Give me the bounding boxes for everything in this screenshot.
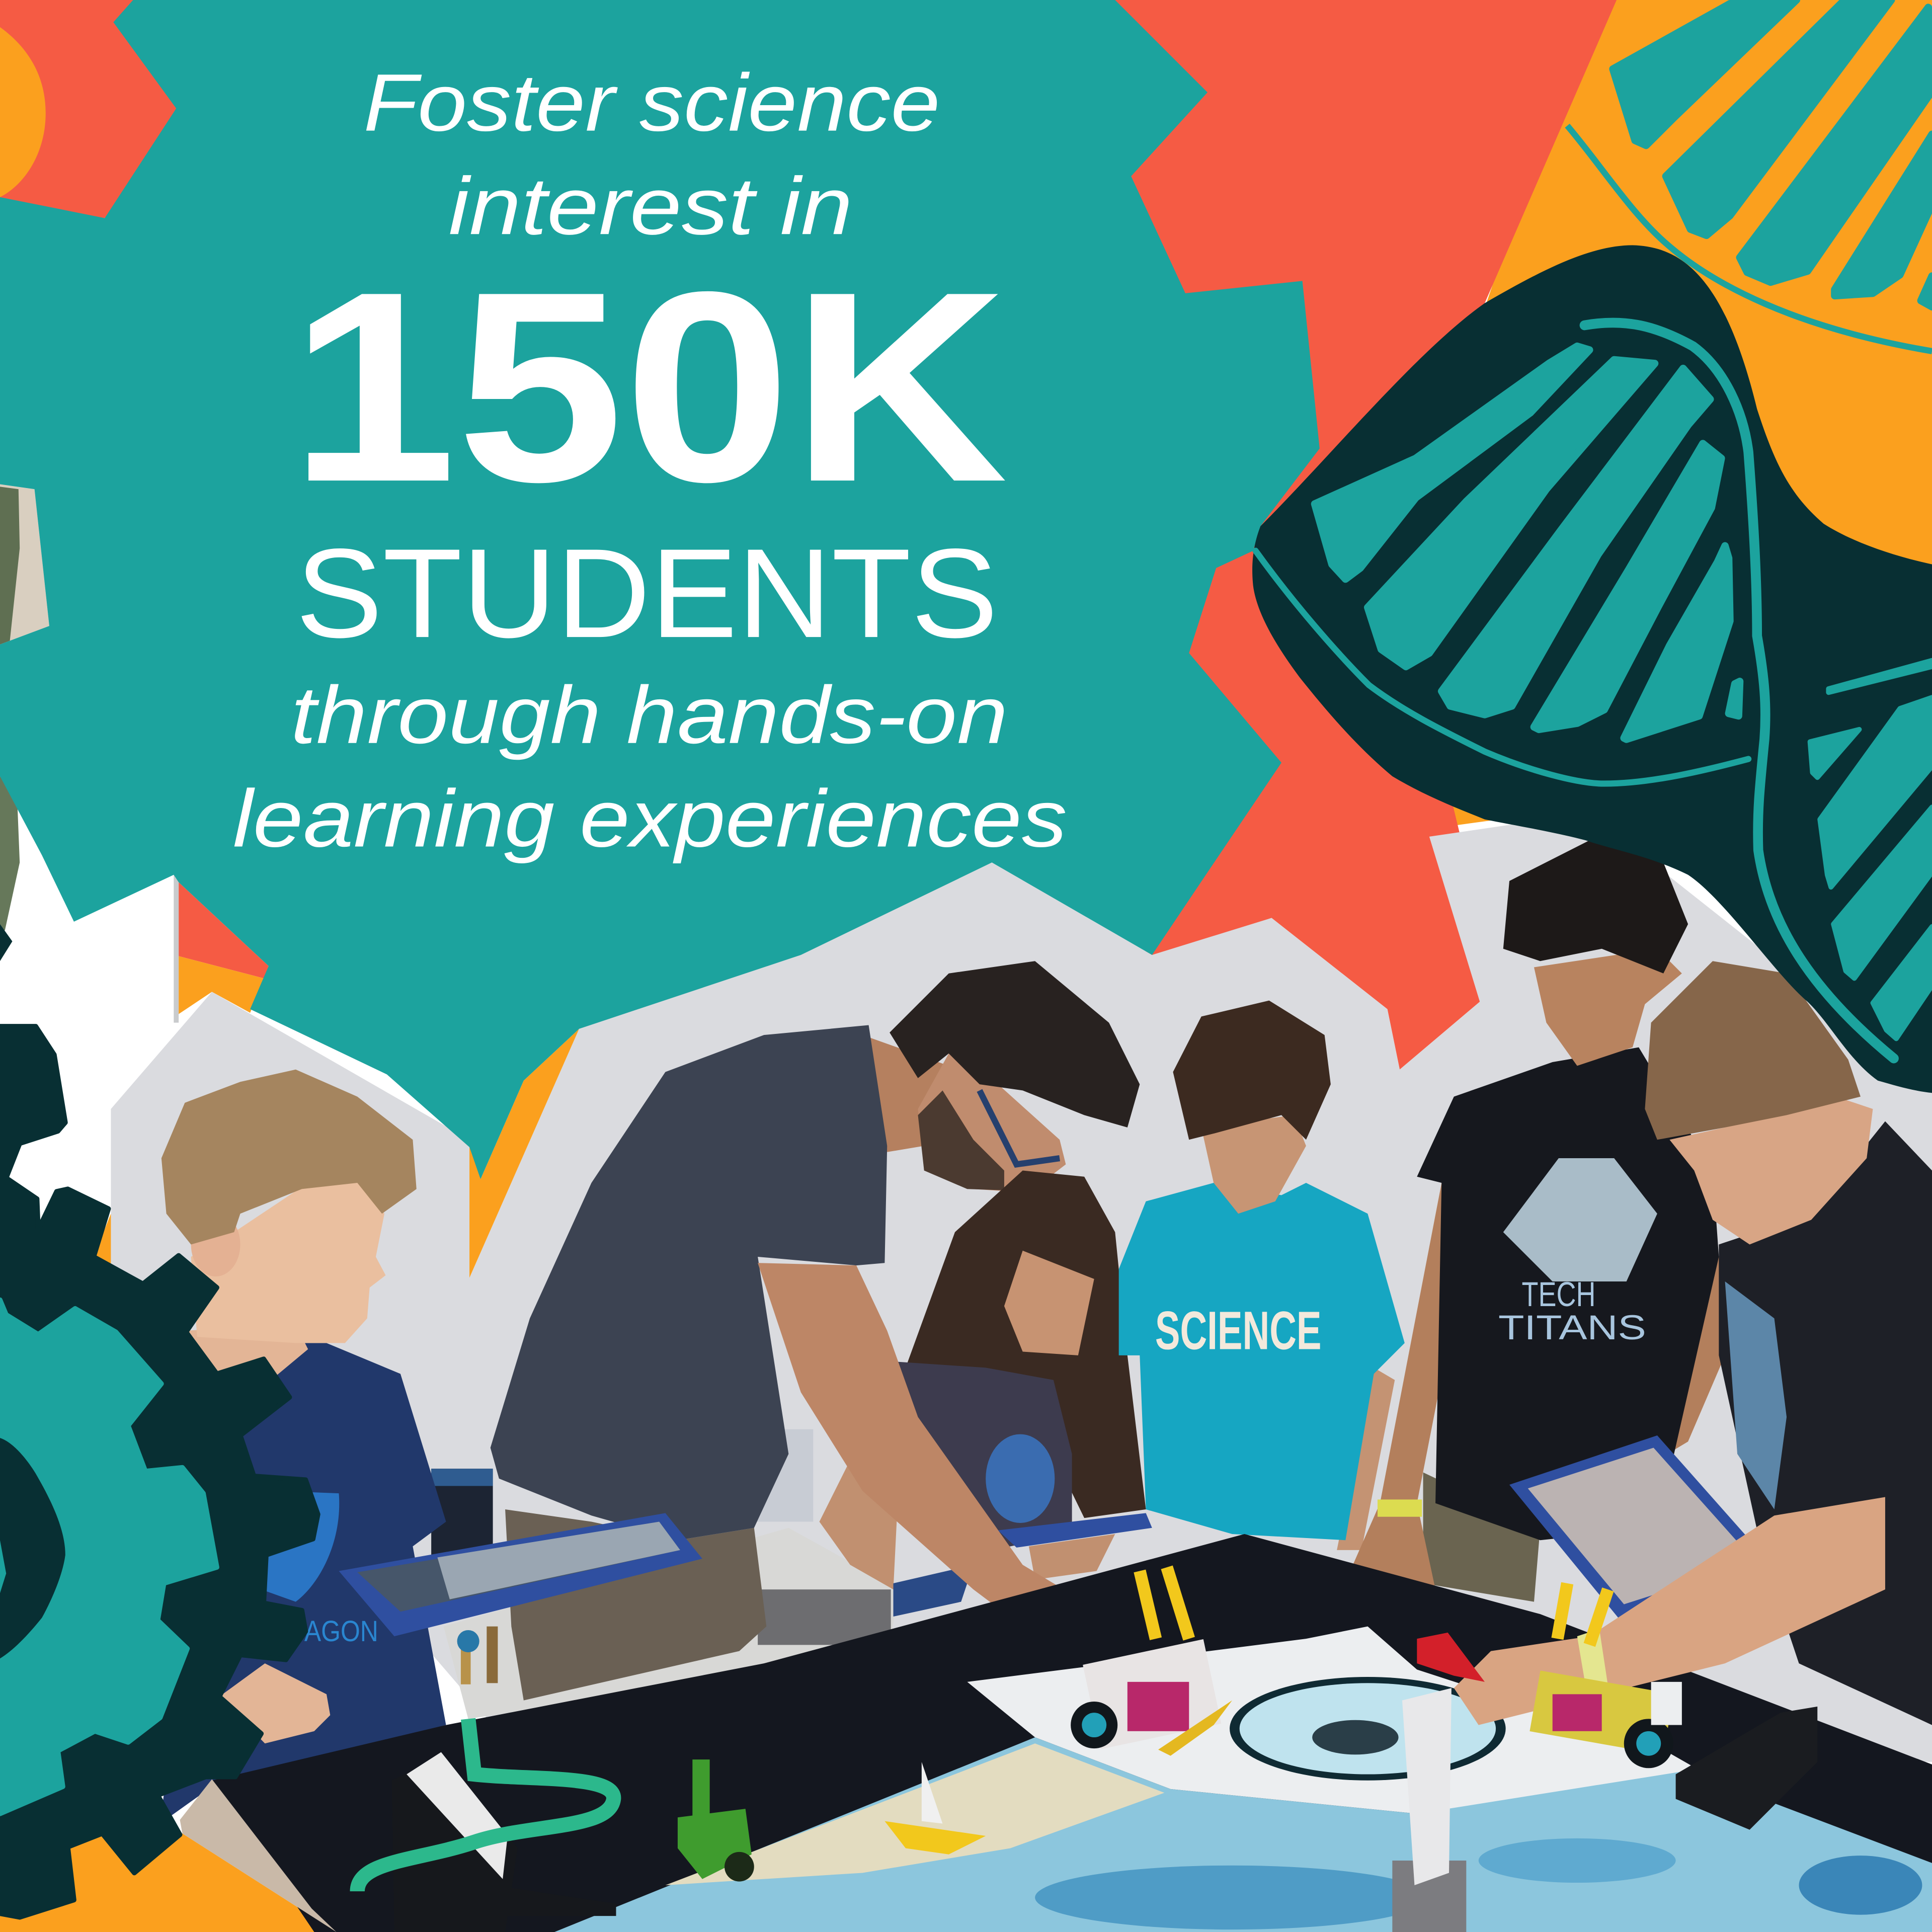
big number: 150K <box>290 235 1008 538</box>
tall boy hair <box>1503 840 1688 974</box>
photo fragment left <box>0 484 49 645</box>
DNA helix top right <box>1613 0 1932 307</box>
right boy shirt <box>1719 1121 1932 1725</box>
second helix rungs <box>1810 661 1932 1038</box>
girl hair <box>906 1171 1146 1518</box>
gear centre hole <box>0 1438 65 1658</box>
person: boy on left <box>160 1070 446 1823</box>
man glasses <box>980 1090 1060 1164</box>
helix dark body <box>1252 245 1932 1093</box>
intro line two: interest in <box>448 161 853 252</box>
left boy shirt text: AGON <box>304 1615 378 1648</box>
girl hands <box>1029 1534 1115 1580</box>
tall boy shirt <box>1417 1048 1719 1540</box>
left boy hand <box>219 1663 330 1743</box>
person: boy in teal shirt <box>1119 1001 1405 1550</box>
left boy neck <box>185 1325 308 1386</box>
shirt text: SCIENCE <box>1155 1300 1322 1361</box>
red and orange wedge <box>174 875 269 1023</box>
boy shirt <box>1119 1183 1405 1540</box>
gear centre sliver <box>0 1540 6 1593</box>
man shirt <box>491 1025 887 1540</box>
measuring tape <box>357 1719 614 1891</box>
robot centre <box>1071 1567 1232 1756</box>
photo fragment plant <box>0 776 20 930</box>
girl tablet <box>998 1513 1152 1548</box>
mat logo circle <box>1230 1677 1506 1781</box>
person: tall boy <box>1353 840 1725 1604</box>
man neck <box>862 1035 949 1152</box>
main teal shape <box>0 0 1320 1179</box>
DNA top strand <box>1567 126 1932 351</box>
table background items <box>431 1429 900 1719</box>
tall boy face <box>1534 949 1682 1066</box>
background shape: orange circle top left <box>0 27 46 197</box>
man arm <box>758 1263 1140 1657</box>
gear small top piece <box>0 924 12 961</box>
wristband <box>1378 1499 1422 1517</box>
orange corner bottom left <box>0 1811 337 1932</box>
tablet right <box>1509 1435 1772 1620</box>
black attachment right <box>1676 1707 1817 1830</box>
left boy hair <box>162 1070 417 1244</box>
white figure with red top <box>1392 1633 1485 1932</box>
helix lower strand <box>1256 551 1748 784</box>
map mat <box>554 1737 1932 1932</box>
robot right <box>1530 1583 1682 1768</box>
orange bits behind gear <box>36 1214 111 1264</box>
helix strand lines <box>1584 323 1894 1059</box>
tall boy left arm <box>1353 1183 1473 1604</box>
black robot module <box>392 1752 616 1932</box>
intro line one: Foster science <box>363 58 940 148</box>
boy hair <box>1173 1001 1331 1140</box>
left boy shirt logo <box>261 1491 339 1602</box>
left boy ear <box>191 1213 240 1276</box>
girl face <box>1004 1251 1094 1355</box>
gear outer <box>0 1026 318 1917</box>
DNA helix main <box>1252 245 1932 1093</box>
right boy shirt graphic <box>1725 1281 1787 1509</box>
gear teal inner <box>0 1300 217 1814</box>
left boy shirt <box>160 1343 446 1823</box>
felt photo background <box>111 813 1932 1762</box>
background shape: orange top right <box>1380 0 1932 826</box>
gear <box>0 924 318 1917</box>
girl shirt <box>894 1361 1072 1559</box>
girl shirt graphic <box>986 1434 1055 1523</box>
background shape: red star <box>1109 0 1617 1070</box>
man trousers <box>505 1509 766 1701</box>
tall boy trousers <box>1423 1473 1540 1602</box>
tall boy shirt text <box>1498 1275 1646 1347</box>
closing line two: learning experiences <box>233 773 1067 864</box>
man hair <box>890 961 1140 1128</box>
helix rungs <box>1315 346 1740 739</box>
boy arm <box>1337 1367 1395 1550</box>
table side card <box>180 1779 337 1932</box>
tall boy shirt text: TECH <box>1521 1275 1595 1314</box>
white mat <box>967 1627 1707 1814</box>
right boy wristband <box>1577 1629 1608 1694</box>
man face <box>918 1054 1066 1193</box>
game table <box>212 1534 1932 1932</box>
background shape: red corner top left <box>0 0 185 218</box>
right boy hair <box>1645 961 1861 1140</box>
right boy face <box>1669 1097 1873 1244</box>
tablet left <box>339 1513 702 1636</box>
green model <box>678 1759 754 1882</box>
yellow boat <box>884 1762 986 1855</box>
orange wedge centre <box>469 1029 579 1278</box>
students label: STUDENTS <box>296 523 998 664</box>
headline copy <box>233 58 1067 864</box>
man beard <box>918 1090 1004 1190</box>
tall boy shirt text: TITANS <box>1498 1308 1646 1347</box>
person: girl <box>820 1171 1152 1617</box>
tall boy shirt robot <box>1503 1158 1657 1281</box>
closing line one: through hands-on <box>291 670 1008 761</box>
boy face <box>1201 1115 1306 1214</box>
person: boy on right <box>1454 961 1932 1725</box>
left boy face <box>191 1180 386 1343</box>
tall boy right arm <box>1657 1251 1725 1460</box>
girl lower skirt <box>894 1565 974 1617</box>
girl arm <box>820 1460 900 1589</box>
right boy arm <box>1454 1497 1885 1725</box>
person: man <box>491 961 1140 1701</box>
keys <box>457 1627 498 1684</box>
